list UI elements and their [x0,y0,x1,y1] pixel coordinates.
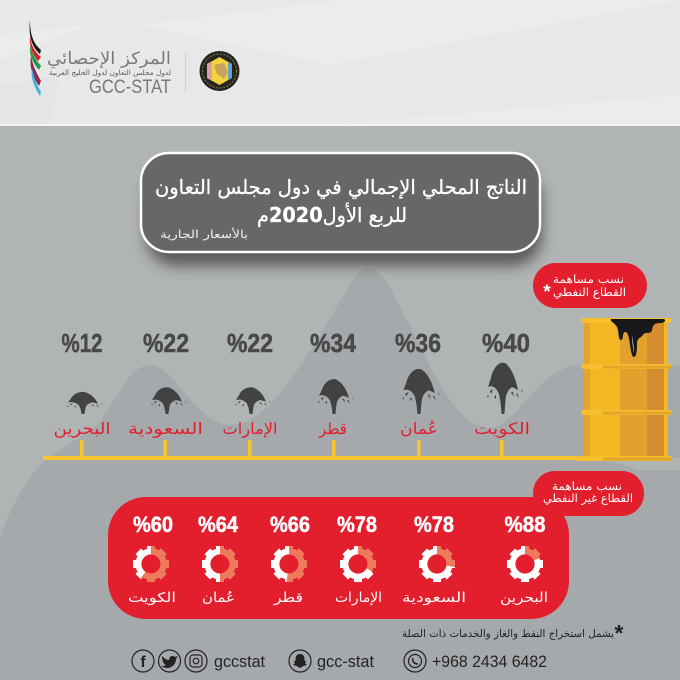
kuwait non-oil: الكويت [128,590,176,606]
callout: oil sector [533,263,647,308]
handle: gcc-stat: gcc-stat [317,652,374,671]
logo arabic subtitle: لدول مجلس التعاون لدول الخليج العربية [49,69,171,77]
oman oil: عُمان [400,419,438,438]
title note: بالأسعار الجارية [160,227,248,241]
oil barrel [575,318,672,461]
uae non-oil: %78 [337,512,377,537]
saudi non-oil: %78 [414,512,454,537]
kuwait oil: الكويت [474,419,530,439]
saudi oil: %22 [143,328,189,358]
qatar oil: قطر [318,419,347,439]
footnote [402,620,624,646]
footnote: * [615,620,624,646]
qatar non-oil: قطر [273,590,303,606]
qatar non-oil [270,512,310,606]
timeline [43,440,585,460]
kuwait oil: %40 [482,328,530,358]
bahrain oil: البحرين [54,419,110,439]
icon: twitter [158,650,180,672]
logo arabic name: المركز الإحصائي [47,49,171,69]
oman non-oil: عُمان [202,590,235,606]
title line 1: الناتج المحلي الإجمالي في دول مجلس التعاون [155,175,527,200]
kuwait oil [474,328,530,439]
callout: oil sector: * [543,282,551,303]
bahrain oil: %12 [62,328,102,358]
qatar oil: %34 [310,328,356,358]
saudi oil: السعودية [128,419,203,439]
oman oil: %36 [395,328,441,358]
oman oil [395,328,441,438]
callout: non-oil sector [533,471,644,516]
kuwait non-oil [128,512,176,606]
chart: oil sector share [54,328,530,439]
header band [0,0,680,126]
phone number: +968 2434 6482 [432,652,547,671]
uae oil [222,328,278,439]
emblem [200,51,240,91]
callout: non-oil sector: القطاع غير النفطي [543,491,633,506]
callout: oil sector: القطاع النفطي [553,285,626,299]
callout: non-oil sector: نسب مساهمة [552,479,622,493]
bahrain oil [54,328,110,439]
logo ribbon [30,20,41,96]
handle: gccstat: gccstat [214,652,265,671]
oman non-oil: %64 [198,512,239,537]
footer contacts [132,650,547,672]
icon: facebook [132,650,154,672]
uae oil: الإمارات [222,419,278,439]
footnote: يشمل استخراج النفط والغاز والخدمات ذات الصلة [402,628,614,640]
oman non-oil [198,512,239,606]
bahrain non-oil [500,512,548,606]
saudi non-oil [402,512,466,606]
saudi non-oil: السعودية [402,590,466,606]
qatar oil [310,328,356,439]
logo: GCC-STAT [30,20,240,98]
title line 2: للربع الأول2020م [257,203,407,227]
uae oil: %22 [227,328,273,358]
title panel [141,153,542,266]
oil spill [611,319,665,357]
uae non-oil [335,512,382,606]
bahrain non-oil: %88 [504,512,546,537]
uae non-oil: الإمارات [335,590,382,606]
icon: instagram [185,650,207,672]
icon: whatsapp [404,650,426,672]
qatar non-oil: %66 [270,512,310,537]
bahrain non-oil: البحرين [500,590,548,606]
callout: oil sector: نسب مساهمة [553,272,624,286]
icon: facebook: f [140,654,146,671]
icon: snapchat [289,650,311,672]
kuwait non-oil: %60 [133,512,173,537]
logo latin name: GCC-STAT [89,77,171,98]
saudi oil [128,328,203,439]
panel: non-oil sector share [108,497,569,619]
